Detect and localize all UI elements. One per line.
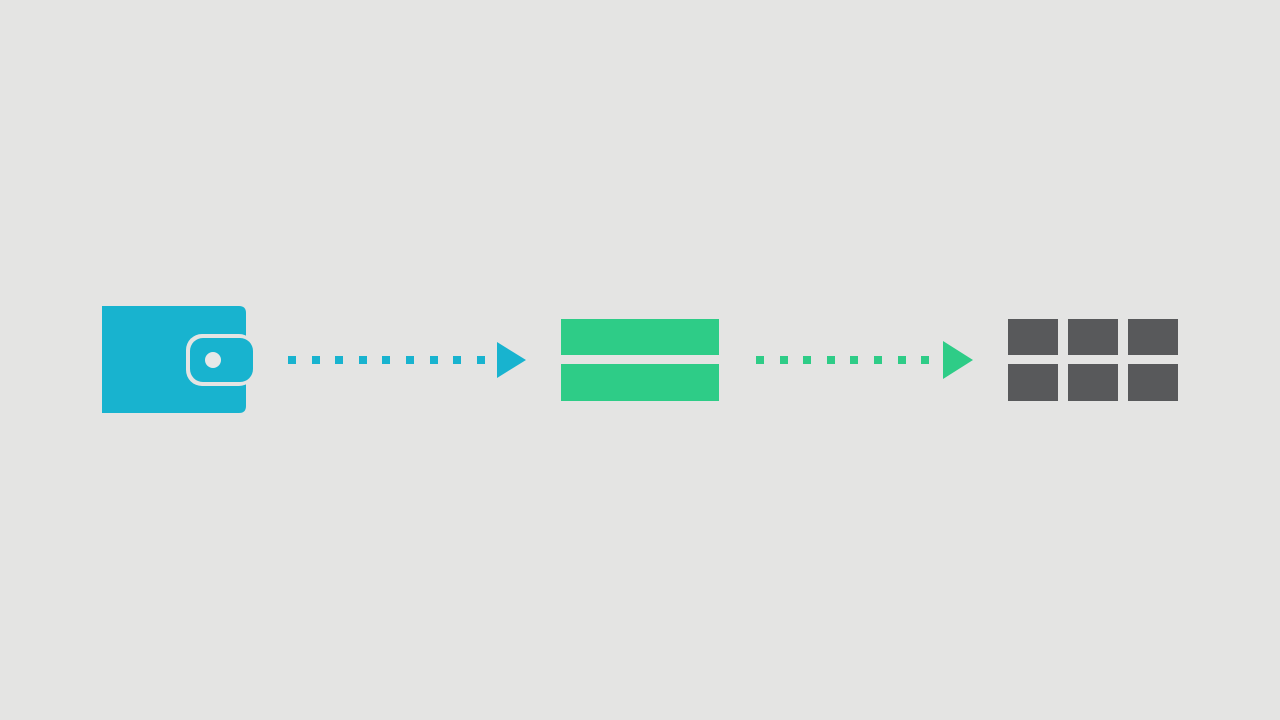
arrow: teal dotted bbox=[288, 342, 526, 378]
icon: wallet bbox=[102, 306, 255, 413]
icon: green bars bbox=[561, 319, 719, 401]
arrow: green dotted bbox=[756, 341, 973, 379]
icon: grey grid bbox=[1008, 319, 1178, 401]
